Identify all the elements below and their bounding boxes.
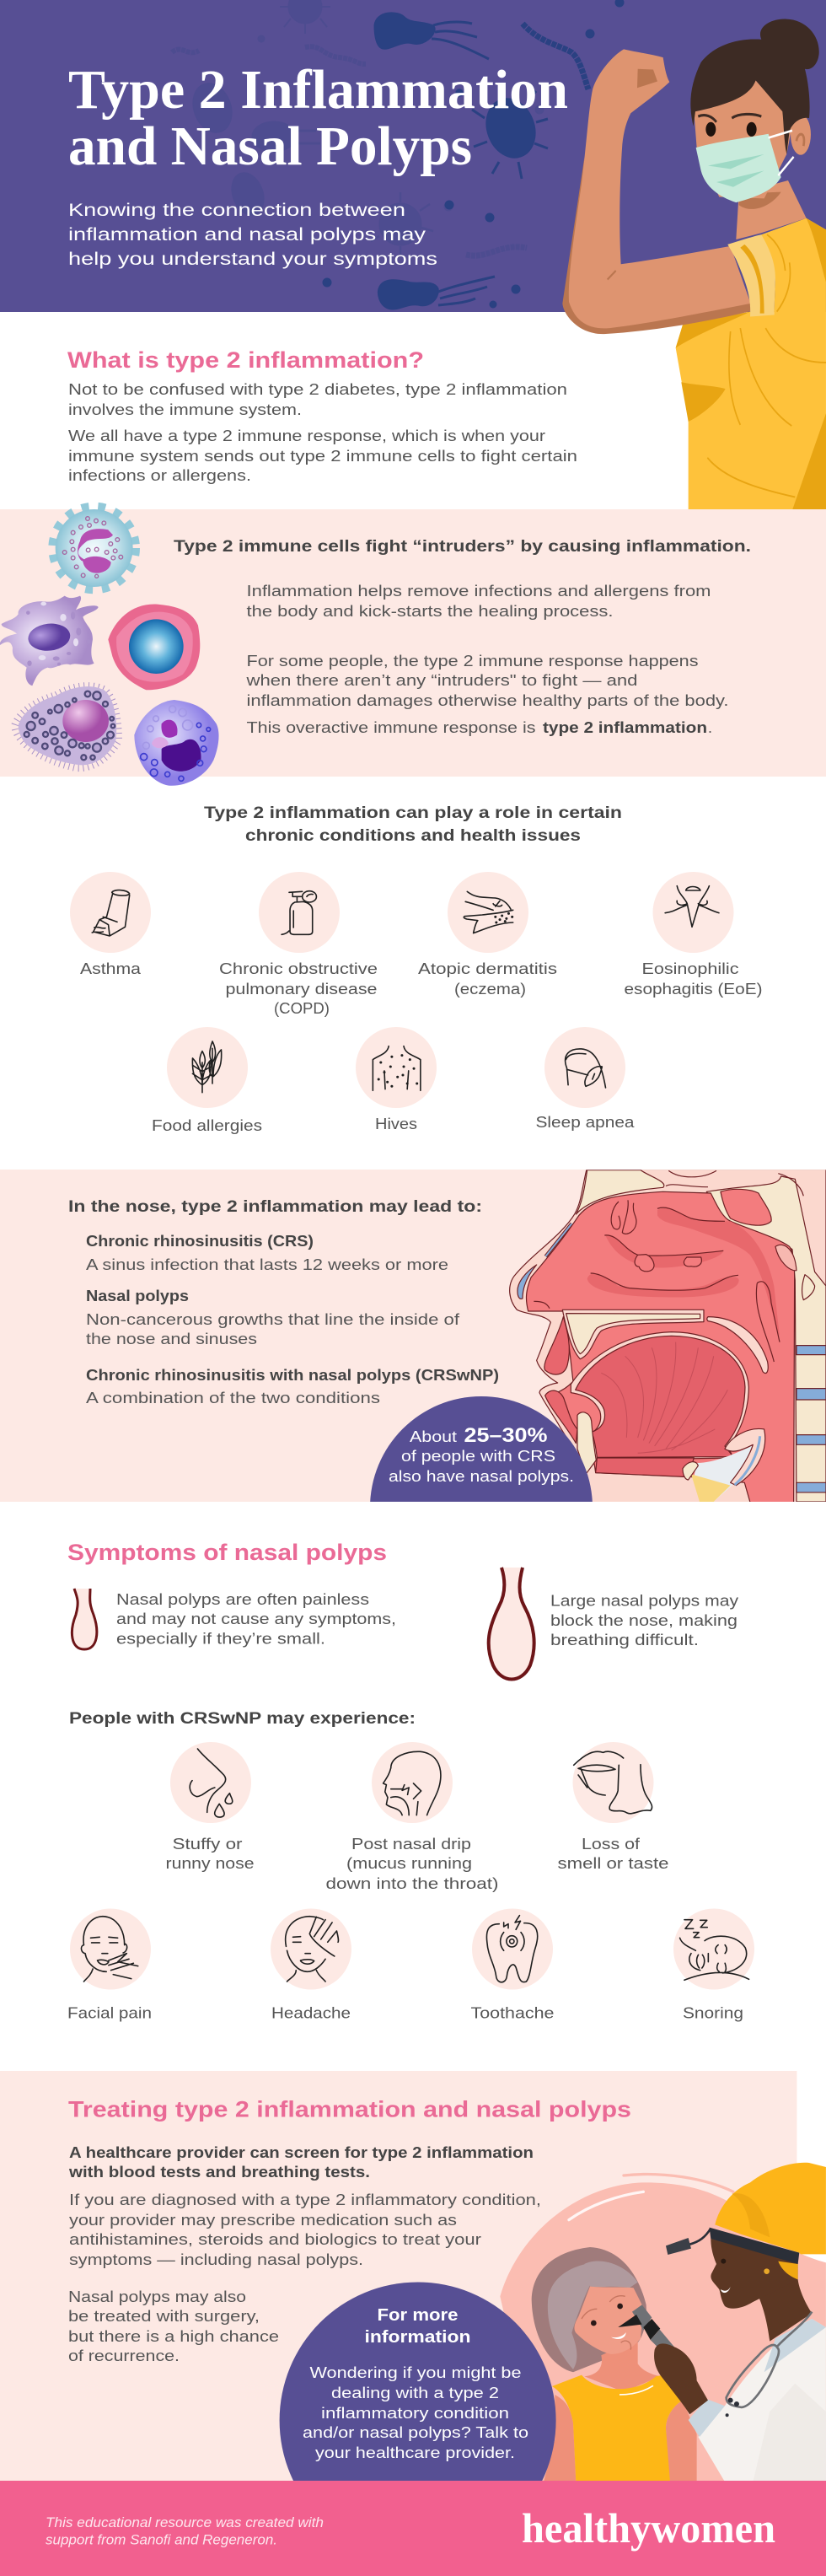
definition: CRS <box>86 1233 448 1273</box>
spinal discs <box>796 1346 826 1492</box>
label: Eosinophilic <box>642 960 738 977</box>
label: runny nose <box>165 1855 255 1872</box>
callout: for more information: information <box>364 2328 470 2347</box>
icon: nose and eye <box>574 1751 652 1814</box>
heading <box>204 804 622 845</box>
text: small polyps: especially if they’re small. <box>116 1631 325 1648</box>
label: Asthma <box>80 960 142 977</box>
text block: inflammation helps: the body and kick-starts the healing process. <box>246 603 614 620</box>
text block: overactive response: This overactive immune response is <box>246 719 536 736</box>
illustration: nasal cavity anatomy <box>510 1170 826 1503</box>
item: post nasal drip <box>325 1742 499 1892</box>
text: sponsor note: support from Sanofi and Regeneron. <box>46 2533 277 2548</box>
label: Food allergies <box>152 1117 262 1134</box>
icon: wheat <box>192 1041 222 1093</box>
text: large polyps <box>550 1592 738 1648</box>
upper lip <box>544 1317 569 1374</box>
item: loss of smell or taste <box>558 1742 669 1872</box>
icon: hand on forehead <box>286 1917 338 1982</box>
muscle band <box>596 1458 694 1477</box>
icon: head profile with throat <box>384 1751 441 1815</box>
heading: What is type 2 inflammation? <box>67 347 424 373</box>
text: small polyps <box>116 1591 396 1648</box>
paragraph 2: immune system sends out type 2 immune cells to fight certain <box>68 448 577 465</box>
label: Headache <box>271 2005 351 2022</box>
label: esophagitis (EoE) <box>624 981 762 998</box>
panel: footer <box>0 2481 826 2576</box>
icon: scratching hands <box>464 891 513 933</box>
paragraph 2: We all have a type 2 immune response, which is when your <box>68 428 545 444</box>
tongue <box>571 1332 748 1460</box>
text block: inflammation helps: Inflammation helps remove infections and allergens from <box>246 583 711 600</box>
subheading: People with CRSwNP may experience: <box>69 1710 416 1728</box>
illustration: immune cells <box>0 508 219 786</box>
cartilage <box>518 1265 537 1299</box>
text: hero subtitle: inflammation and nasal polyps may <box>68 225 426 245</box>
text: small polyps: and may not cause any symptoms, <box>116 1611 396 1627</box>
definition: nasal polyps: the nose and sinuses <box>86 1331 257 1347</box>
definition: nasal polyps: Non-cancerous growths that line the inside of <box>86 1311 460 1328</box>
band background <box>0 509 826 777</box>
icon: inhaler <box>92 890 130 936</box>
arm shadow <box>562 158 752 334</box>
text: screening: with blood tests and breathing tests. <box>68 2164 370 2181</box>
panel: hero header <box>0 0 826 312</box>
callout: 25 to 30 percent <box>370 1396 593 1502</box>
text: small polyps: Nasal polyps are often painless <box>116 1591 369 1608</box>
definition: CRSwNP <box>86 1367 499 1406</box>
item: facial pain <box>67 1909 152 2022</box>
icon: CPAP mask <box>566 1049 606 1088</box>
label: down into the throat) <box>325 1875 499 1892</box>
icon: small polyp <box>72 1589 97 1649</box>
label <box>325 1836 499 1892</box>
panel: treating type 2 inflammation <box>0 2071 826 2481</box>
doctor <box>654 2163 826 2482</box>
illustration: doctor examining patient <box>500 2163 826 2482</box>
item: food allergies <box>152 1027 262 1134</box>
cell: pink with blue nucleus <box>108 605 200 690</box>
text block: inflammation helps <box>246 583 711 620</box>
heading: In the nose, type 2 inflammation may lead to: <box>68 1198 482 1216</box>
callout: 25 to 30 percent: of people with CRS <box>401 1448 555 1465</box>
icon: oxygen tank <box>282 891 316 934</box>
text: medication <box>69 2191 541 2268</box>
definition: nasal polyps <box>86 1288 460 1347</box>
label: Toothache <box>470 2005 555 2022</box>
item: sleep apnea <box>536 1027 636 1131</box>
text block: overactive response: type 2 inflammation <box>543 719 707 736</box>
conchae shading <box>587 1208 780 1336</box>
panel: immune cells band <box>0 508 826 786</box>
icon: sleeping head <box>680 1920 749 1980</box>
shirt <box>676 218 826 510</box>
callout: 25 to 30 percent: also have nasal polyps. <box>389 1468 574 1485</box>
mask <box>696 134 781 202</box>
text: medication: If you are diagnosed with a type 2 inflammatory condition, <box>69 2191 541 2208</box>
logo: healthywomen: healthywomen <box>522 2504 775 2552</box>
text: surgery: but there is a high chance <box>68 2328 279 2345</box>
paragraph 2: infections or allergens. <box>68 467 251 484</box>
cell: teal eosinophil <box>53 508 135 589</box>
paragraph 1: involves the immune system. <box>68 401 302 418</box>
label: Snoring <box>683 2005 743 2022</box>
lower lip <box>545 1390 577 1444</box>
cell: basophil with granules <box>15 686 118 767</box>
icon: torso with rash <box>373 1046 421 1090</box>
text: hero subtitle: help you understand your symptoms <box>68 250 437 269</box>
panel: in the nose <box>0 1170 826 1502</box>
ear <box>791 114 811 155</box>
text block: overactive response: For some people, the type 2 immune response happens <box>246 653 698 670</box>
callout: for more information: your healthcare provider. <box>315 2444 515 2461</box>
item: asthma <box>70 872 151 977</box>
item: toothache <box>470 1909 555 2022</box>
definition: CRSwNP: A combination of the two conditions <box>86 1390 380 1406</box>
paragraph 2 <box>68 428 577 484</box>
text: surgery: Nasal polyps may also <box>68 2288 246 2305</box>
sleeve cuff <box>727 234 775 316</box>
definition: CRS: Chronic rhinosinusitis (CRS) <box>86 1233 314 1250</box>
label <box>558 1836 669 1872</box>
label: (mucus running <box>346 1855 472 1872</box>
polyps <box>611 1200 636 1234</box>
callout: for more information: and/or nasal polyps? Talk to <box>303 2424 528 2441</box>
text: sponsor note: This educational resource was created with <box>46 2515 324 2530</box>
label: Hives <box>375 1116 417 1132</box>
item: atopic dermatitis <box>418 872 557 998</box>
dark bacteria <box>323 0 624 309</box>
heading: hero title: Type 2 Inflammation <box>68 59 568 121</box>
heading: chronic conditions and health issues <box>245 827 581 845</box>
text: medication: your provider may prescribe medication such as <box>69 2212 457 2229</box>
label <box>624 960 762 998</box>
band background <box>0 1170 826 1502</box>
icon: tooth with pain rings <box>486 1916 538 1982</box>
paragraph 1 <box>68 381 567 418</box>
callout: for more information: For more <box>378 2306 459 2325</box>
callout heading: intruders: Type 2 immune cells fight “intruders” by causing inflammation. <box>174 538 751 556</box>
background blob <box>500 2182 826 2482</box>
label: Sleep apnea <box>536 1114 636 1131</box>
icon: esophagus <box>665 886 719 927</box>
text block: overactive response: . <box>708 719 712 736</box>
text: screening: A healthcare provider can screen for type 2 inflammation <box>69 2144 534 2161</box>
footer background <box>0 2481 826 2576</box>
lower gum <box>577 1412 596 1474</box>
sphenoid sinus <box>721 1189 771 1225</box>
eyes <box>705 122 757 137</box>
adenoid and tube <box>775 1245 796 1271</box>
text: screening <box>68 2144 534 2181</box>
text: hero subtitle: Knowing the connection between <box>68 201 405 220</box>
label: (COPD) <box>274 1000 330 1017</box>
heading: Treating type 2 inflammation and nasal polyps <box>68 2096 631 2122</box>
cream bones top and spine <box>576 1170 826 1502</box>
callout: for more information <box>280 2282 556 2481</box>
panel: chronic conditions <box>70 804 762 1134</box>
text: surgery: of recurrence. <box>68 2347 180 2364</box>
label <box>219 960 378 1017</box>
text block: overactive response <box>245 653 728 736</box>
definition: nasal polyps: Nasal polyps <box>86 1288 189 1304</box>
neck <box>736 180 807 239</box>
label <box>418 960 557 998</box>
band background <box>0 2071 797 2481</box>
text: surgery: be treated with surgery, <box>68 2308 260 2325</box>
text: large polyps: block the nose, making <box>550 1612 738 1629</box>
icon: runny nose <box>190 1749 233 1817</box>
label: pulmonary disease <box>226 981 378 998</box>
heading: hero title: and Nasal Polyps <box>68 116 472 177</box>
label: Facial pain <box>67 2005 152 2022</box>
text: medication: symptoms — including nasal polyps. <box>69 2251 363 2268</box>
cell: lilac macrophage <box>0 596 99 686</box>
epiglottis and larynx <box>694 1444 754 1502</box>
item: hives <box>356 1027 437 1132</box>
icon: large polyp <box>489 1568 534 1680</box>
face <box>694 80 792 198</box>
palate <box>562 1310 704 1359</box>
text: hero subtitle <box>68 201 437 269</box>
definition: CRS: A sinus infection that lasts 12 weeks or more <box>86 1256 448 1273</box>
callout: for more information: inflammatory condition <box>321 2405 509 2422</box>
paragraph 1: Not to be confused with type 2 diabetes, type 2 inflammation <box>68 381 567 398</box>
item: snoring <box>673 1909 754 2022</box>
heading: hero title <box>68 59 568 177</box>
nasal cavity and throat <box>526 1191 795 1503</box>
hair <box>690 19 819 154</box>
icon: face with hand <box>81 1917 138 1982</box>
illustration: woman flexing arm wearing mask <box>562 19 826 510</box>
heading: Symptoms of nasal polyps <box>67 1540 387 1565</box>
label: (eczema) <box>454 981 526 998</box>
hero background <box>0 0 826 312</box>
item: headache <box>271 1909 351 2022</box>
callout: 25 to 30 percent: About <box>410 1428 457 1445</box>
arm <box>569 49 751 328</box>
item: stuffy nose <box>165 1742 255 1872</box>
text: surgery <box>68 2288 279 2364</box>
item: COPD <box>219 872 378 1017</box>
panel: what is type 2 inflammation <box>67 347 577 484</box>
text: large polyps: Large nasal polyps may <box>550 1592 738 1609</box>
callout: 25 to 30 percent: 25–30% <box>464 1424 548 1447</box>
label: smell or taste <box>558 1855 669 1872</box>
faint bacteria pattern <box>172 0 544 255</box>
patient <box>532 2247 697 2482</box>
item: eosinophilic esophagitis <box>624 872 762 998</box>
label: Atopic dermatitis <box>418 960 557 977</box>
skin layer <box>510 1170 826 1503</box>
text block: overactive response: when there aren’t any “intruders" to fight — and <box>245 672 637 689</box>
heading: Type 2 inflammation can play a role in certain <box>204 804 622 822</box>
callout: for more information: Wondering if you might be <box>310 2364 521 2381</box>
panel: symptoms of nasal polyps <box>67 1540 754 2022</box>
cell: violet neutrophil <box>134 700 219 786</box>
label: Loss of <box>582 1836 641 1853</box>
text: sponsor note <box>46 2515 324 2548</box>
otoscope <box>618 2305 674 2347</box>
text: medication: antihistamines, steroids and biologics to treat your <box>69 2231 481 2248</box>
text block: overactive response: inflammation damages otherwise healthy parts of the body. <box>246 692 728 709</box>
callout: for more information: dealing with a type 2 <box>331 2385 499 2401</box>
label: Chronic obstructive <box>219 960 378 977</box>
label: Stuffy or <box>172 1836 243 1853</box>
label: Post nasal drip <box>351 1836 471 1853</box>
text: large polyps: breathing difficult. <box>550 1632 699 1648</box>
label <box>165 1836 255 1872</box>
definition: CRSwNP: Chronic rhinosinusitis with nasal polyps (CRSwNP) <box>86 1367 499 1384</box>
